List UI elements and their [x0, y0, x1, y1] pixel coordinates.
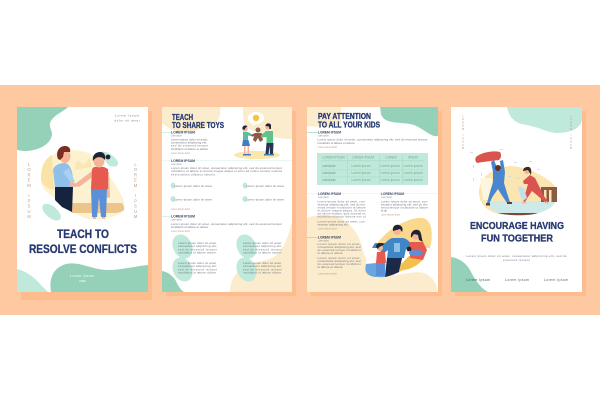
table: Lorem ipsum	[322, 171, 336, 175]
table: Lorem ipsum	[404, 164, 423, 168]
section three	[162, 208, 282, 233]
title: TEACH TO	[57, 227, 109, 241]
section one: LOREM IPSUM	[171, 130, 195, 134]
girl in red pajamas	[522, 167, 548, 204]
section left: Lorem ipsum	[318, 196, 329, 199]
section three: Lorem ipsum dolor sit amet, consectetur adipiscing elit, sed do eiusmod tempor	[171, 222, 282, 226]
section right: Lorem ipsum dolor	[381, 214, 400, 216]
section left: LOREM IPSUM	[318, 192, 341, 196]
section left: ad minim veniam, quis nostrud ex	[318, 212, 366, 216]
section one: Lorem ipsum dolor sit amet,	[171, 138, 208, 142]
table: Lorem ipsum	[404, 178, 423, 182]
title: TO ALL YOUR KIDS	[318, 120, 380, 130]
cream blob bottom	[307, 215, 438, 292]
section right	[381, 192, 428, 216]
leaf text blocks: Lorem ipsum dolor sit amet,	[178, 241, 217, 245]
section right: et do	[381, 208, 387, 212]
section three: LOREM IPSUM	[171, 214, 195, 218]
green corner	[162, 271, 184, 292]
leaf text blocks: consectetur adipiscing elit,	[178, 264, 217, 268]
section lower left: consectetur adipiscing elit, sed	[318, 245, 361, 249]
section two: LOREM IPSUM	[171, 159, 195, 163]
intro section: incididunt ut labore et dolore	[318, 141, 355, 145]
table: IPSUM	[408, 156, 418, 160]
section lower left: do eiusmod tempor incididunt	[318, 262, 361, 266]
vertical label right: LOREM IPSUM	[134, 162, 138, 219]
title: TEACH	[172, 113, 193, 122]
mint corner	[17, 269, 48, 292]
pillow	[475, 151, 501, 163]
bullet list: Lorem ipsum dolor sit amet	[246, 198, 284, 202]
section one	[162, 130, 208, 155]
boy	[53, 146, 80, 212]
table: Lorem ipsum	[352, 164, 371, 168]
bullet list: Lorem ipsum dolor sit amet	[246, 184, 284, 188]
section right: Lorem ipsum	[381, 196, 392, 199]
section left: Lorem ipsum dolor sit amet, con-	[318, 200, 366, 204]
title	[470, 221, 564, 244]
panel: cover page	[17, 107, 152, 300]
section lower left: do eiusmod tempor incididunt	[318, 248, 361, 252]
intro section: LOREM IPSUM	[318, 130, 341, 134]
leaf text blocks: Lorem ipsum dolor sit amet,	[243, 241, 282, 245]
section lower left	[307, 235, 361, 276]
section right: Lorem ipsum dolor sit amet, con-	[381, 200, 428, 204]
body text	[466, 254, 567, 262]
footer text: Lorem Ipsum	[70, 274, 94, 278]
leaf text blocks: incididunt ut labore dolore.	[178, 270, 217, 274]
panel: pay attention to all your kids	[307, 107, 442, 296]
cream blob top left	[162, 107, 220, 132]
bullet list	[170, 182, 284, 202]
title: TO SHARE TOYS	[172, 121, 224, 130]
section left: et dolore magna aliqua. Ut enim	[318, 208, 366, 212]
section one: sed do eiusmod tempor	[171, 144, 208, 148]
section lower left: Lorem ipsum dolor sit amet,	[318, 242, 361, 246]
section lower left: Lorem ipsum dolor sit amet,	[318, 256, 361, 260]
bottom labels: Lorem Ipsum	[466, 278, 490, 282]
vertical label left: LOREM IPSUM	[27, 162, 31, 219]
vertical label right: LOREM IPSUM	[570, 114, 573, 150]
section two: incididunt ut labore et dolore magna aliqua ut enim ad minim veniam nostrud	[171, 169, 282, 173]
panel: teach to share toys	[162, 107, 296, 296]
section left	[307, 192, 438, 230]
title	[318, 112, 380, 130]
section right: sectetur adipiscing elit, sed do eiu-	[381, 202, 428, 206]
title: RESOLVE CONFLICTS	[29, 242, 137, 256]
section three: Lorem ipsum	[171, 218, 182, 222]
green blob bottom	[50, 263, 148, 292]
green blob top left	[17, 107, 68, 151]
green corner	[451, 257, 488, 292]
leaf text blocks: consectetur adipiscing elit,	[243, 244, 282, 248]
leaf text blocks	[169, 231, 282, 285]
intro section: Lorem ipsum	[318, 134, 329, 138]
leaf text blocks: incididunt ut labore dolore.	[243, 270, 282, 274]
title: FUN TOGETHER	[481, 234, 554, 244]
section lower left: consectetur adipiscing elit, sed	[318, 259, 361, 263]
table	[317, 153, 428, 185]
section two: exercitation ullamco laboris.	[171, 172, 216, 176]
section left: sectetur adipiscing elit.	[318, 222, 349, 226]
bottom labels: Lorem Ipsum	[544, 278, 568, 282]
section two: Lorem ipsum	[171, 163, 182, 166]
section two	[162, 159, 292, 176]
illustration: children shaking hands	[41, 146, 125, 221]
leaf text blocks: sed do eiusmod tempor	[178, 248, 217, 252]
section lower left: ut labore et dolore	[318, 265, 343, 269]
table: Lorem ipsum	[380, 171, 400, 175]
speech bubble	[248, 112, 264, 126]
top right caption	[114, 114, 140, 122]
leaf text blocks: sed do eiusmod tempor	[243, 248, 282, 252]
girl	[75, 152, 110, 219]
section left: smod tempor incididunt ut labore	[318, 206, 366, 210]
green blob top right	[380, 107, 438, 136]
leaf text blocks: sed do eiusmod tempor	[178, 268, 217, 272]
section left: ercitation ullamco laboris nisi ut	[318, 214, 366, 218]
boy in blue pajamas	[486, 160, 512, 206]
leaf text blocks: consectetur adipiscing elit,	[178, 244, 217, 248]
leaf text blocks: sed do eiusmod tempor	[243, 268, 282, 272]
table: LOREM IPSUM	[352, 156, 374, 160]
leaf text blocks: Lorem ipsum dolor sit amet,	[178, 261, 217, 265]
flying feathers	[470, 149, 540, 181]
body text: Lorem ipsum dolor sit amet, consectetur adipiscing elit, sed do	[466, 254, 567, 258]
illustration: pillow fight	[470, 149, 557, 215]
table: Lorem ipsum	[322, 178, 336, 182]
cream block top left	[307, 107, 341, 127]
small pillow	[518, 186, 527, 201]
section right: smod tempor incididunt ut labore	[381, 206, 428, 210]
teddy bear	[251, 128, 264, 142]
bottom labels: Lorem Ipsum	[505, 278, 529, 282]
illustration: family	[365, 218, 432, 277]
title	[172, 113, 224, 130]
girl	[242, 126, 253, 156]
bullet list: Lorem ipsum dolor sit amet	[174, 184, 212, 188]
panel: encourage having fun together	[451, 107, 586, 296]
title: PAY ATTENTION	[318, 112, 371, 121]
bullet list: Lorem ipsum dolor sit amet	[174, 198, 212, 202]
man	[261, 123, 274, 156]
section three: Lorem ipsum dolor	[171, 208, 190, 211]
leaf text blocks: consectetur adipiscing elit,	[243, 264, 282, 268]
father	[380, 225, 412, 277]
table: Lorem ipsum	[352, 171, 371, 175]
title: ENCOURAGE HAVING	[470, 221, 564, 232]
top right caption: Lorem Ipsum	[115, 114, 140, 118]
footer text	[70, 274, 94, 283]
section lower left: ut labore et dolore	[318, 251, 343, 255]
table: Lorem ipsum	[352, 178, 371, 182]
mint blob top	[507, 107, 582, 133]
intro section: Lorem ipsum dolor	[318, 146, 337, 149]
title	[29, 227, 137, 256]
leaf text blocks: Lorem ipsum dolor sit amet,	[243, 261, 282, 265]
bottom labels	[466, 278, 568, 282]
illustration: sharing a teddy bear	[234, 112, 280, 159]
section left: sectetur adipiscing elit, sed do eiu-	[318, 202, 366, 206]
section lower left: Lorem ipsum dolor	[318, 272, 337, 276]
table: Lorem ipsum	[322, 164, 336, 168]
cream blob bottom right	[230, 222, 292, 292]
leaf text blocks: incididunt ut labore dolore.	[178, 250, 217, 254]
daughter	[376, 243, 386, 276]
section right: LOREM IPSUM	[381, 192, 404, 196]
body text: eiusmod tempor	[503, 258, 530, 262]
section lower left: LOREM IPSUM	[318, 235, 341, 239]
section two: Lorem ipsum dolor sit amet, consectetur adipiscing elit, sed do eiusmod tempor	[171, 166, 282, 170]
top right caption: dolor sit amet	[114, 118, 140, 122]
section one: Lorem ipsum	[171, 134, 182, 138]
table: Lorem ipsum	[380, 164, 400, 168]
table: LOREM IPSUM	[322, 156, 345, 160]
vertical label left: LOREM IPSUM	[462, 114, 465, 150]
mother and baby	[399, 230, 427, 271]
section left: Lorem ipsum dolor sit amet, con-	[318, 220, 366, 224]
cream blob top right	[243, 107, 292, 139]
section one: Lorem ipsum dolor	[171, 152, 190, 155]
leaf text blocks: incididunt ut labore dolore.	[243, 250, 282, 254]
intro section	[307, 130, 428, 149]
section lower left: Lorem ipsum	[318, 240, 329, 242]
section three: Lorem ipsum dolor	[171, 230, 190, 233]
footer text: 2020	[79, 279, 86, 283]
table: Lorem ipsum	[380, 178, 400, 182]
table: LOREM	[386, 156, 397, 160]
section one: consectetur adipiscing elit,	[171, 140, 207, 144]
intro section: Lorem ipsum dolor sit amet, consectetur adipiscing elit, sed do eiusmod tempor	[318, 138, 428, 142]
table: Lorem ipsum	[404, 171, 423, 175]
section three: incididunt ut labore et dolore.	[171, 225, 209, 229]
peach background band	[0, 85, 600, 315]
section left: Lorem ipsum dolor	[318, 228, 337, 230]
section one: incididunt ut labore et dolore	[171, 147, 208, 151]
